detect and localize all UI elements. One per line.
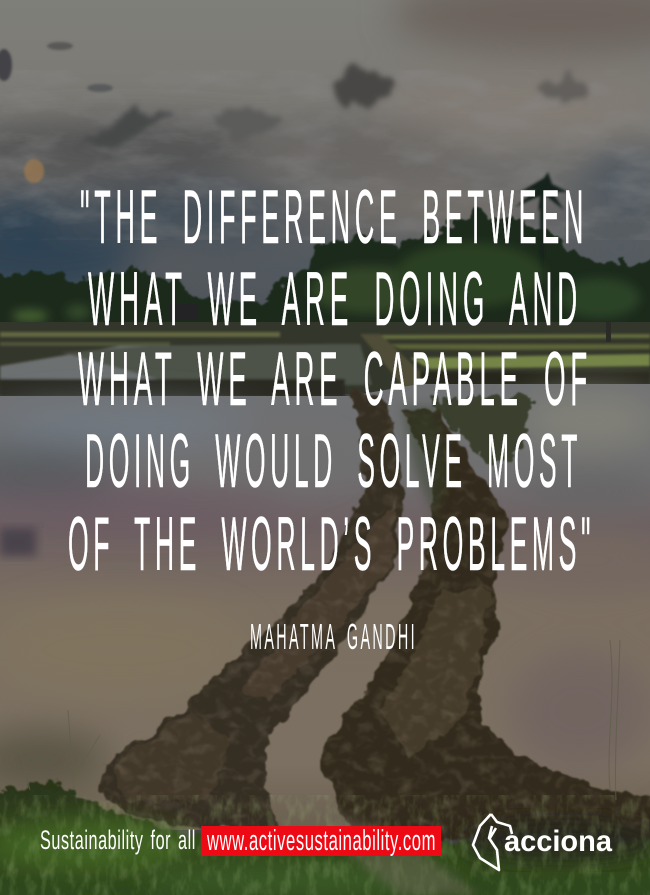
icon: person in field	[606, 322, 611, 342]
footer: website link: www.activesustainability.com	[206, 825, 436, 857]
background photo: mud ridges	[100, 387, 650, 840]
background photo: grass foreground	[0, 640, 650, 895]
logo: acciona	[473, 814, 612, 870]
background photo: tree line	[0, 172, 650, 336]
background photo: paddy fields	[0, 322, 650, 397]
background photo: sky	[0, 0, 650, 340]
background photo: water reflection	[0, 384, 650, 830]
lens flare	[24, 159, 44, 183]
quote text	[68, 175, 595, 587]
footer: website link	[201, 825, 441, 857]
footer: tagline: Sustainability for all	[40, 825, 196, 855]
icon: palm tree	[515, 172, 568, 290]
icon: leaf	[473, 814, 512, 870]
wordmark: acciona	[504, 825, 612, 858]
grass blades	[20, 640, 620, 800]
